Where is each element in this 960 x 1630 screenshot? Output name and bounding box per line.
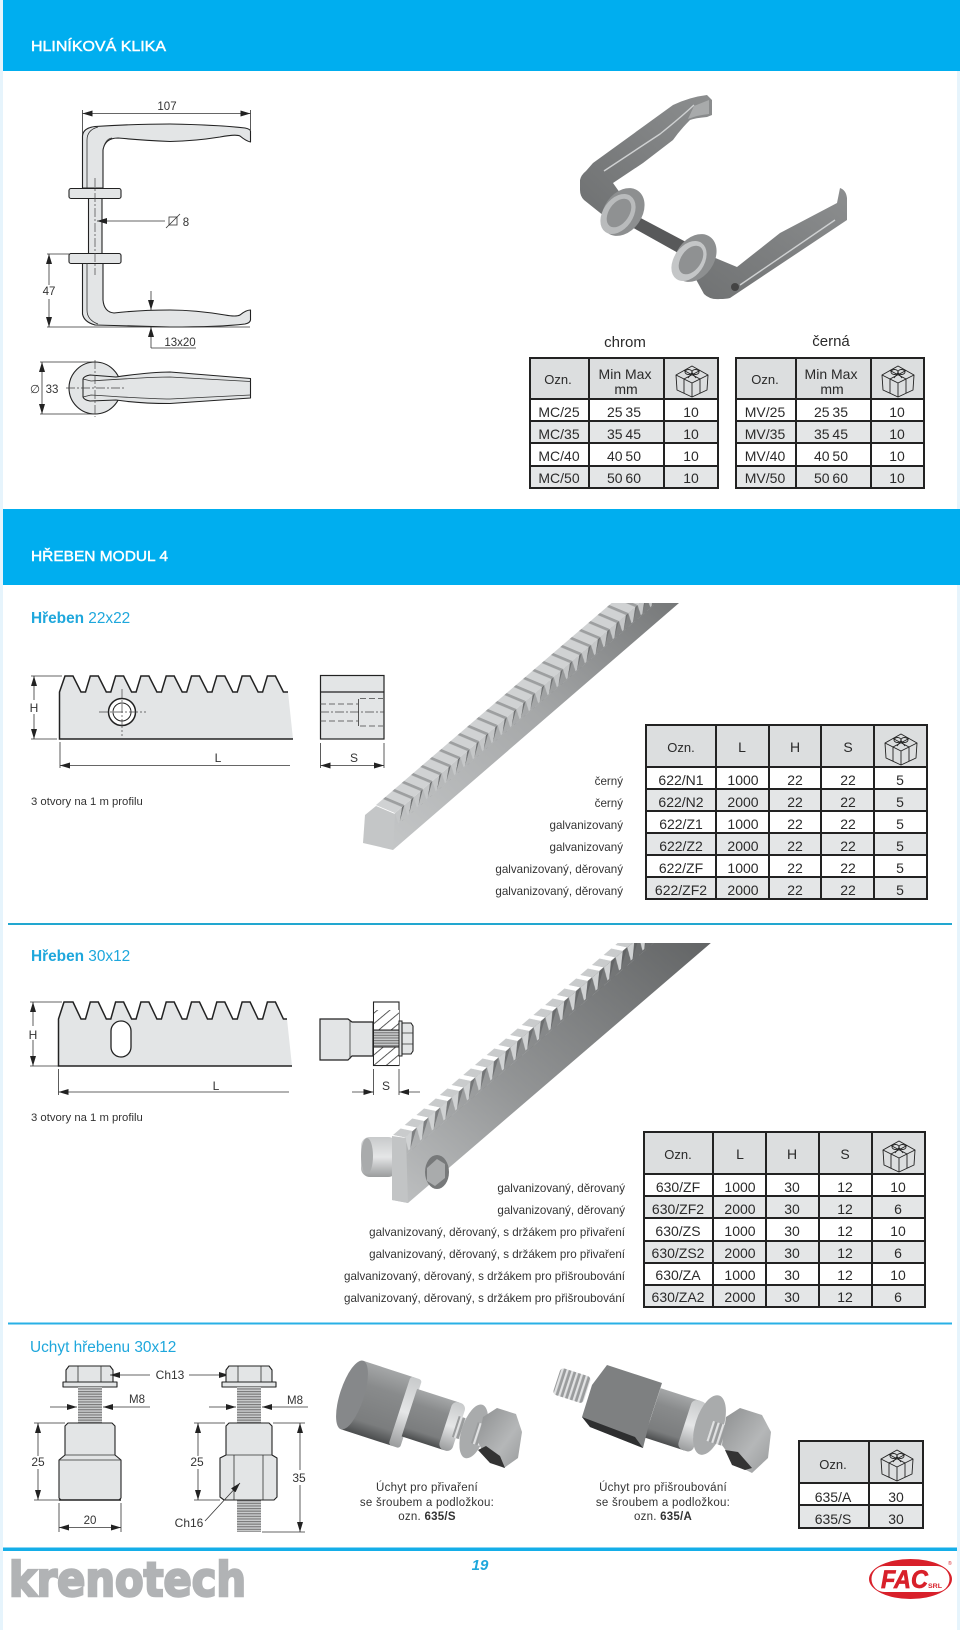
tooth tops <box>376 603 640 813</box>
table: černá: 50 60 <box>814 470 848 486</box>
table: rack 30x12: 30 <box>784 1245 800 1261</box>
table: chrom: 40 50 <box>607 448 641 464</box>
table: rack 22x22: 5 <box>896 860 904 876</box>
logo: FAC <box>869 1559 952 1599</box>
table: černá: MV/50 <box>745 470 785 486</box>
labels: rack 22x22 finishes <box>495 775 623 898</box>
labels: rack 30x12 finishes: galvanizovaný, děrovaný, s držákem pro přišroubování <box>344 1292 626 1305</box>
table: rack 22x22: 2000 <box>727 838 759 854</box>
table: rack 30x12: 2000 <box>724 1245 756 1261</box>
table: rack 22x22: H <box>790 739 800 755</box>
table: bracket 635 <box>799 1441 923 1528</box>
table: rack 22x22: 2000 <box>727 882 759 898</box>
technical drawing: rack 22x22 end view <box>320 676 384 768</box>
table: bracket 635: 635/S <box>815 1511 851 1527</box>
table: chrom: MC/35 <box>538 426 580 442</box>
dimension H: H <box>30 701 38 715</box>
dimension square 8: 8 <box>183 217 189 229</box>
table: chrom: 35 45 <box>607 426 641 442</box>
technical drawing: welded bracket <box>30 1366 229 1532</box>
table: chrom <box>530 358 718 488</box>
table: rack 22x22: 622/Z1 <box>659 816 703 832</box>
dimension 25 <box>30 1423 65 1500</box>
table: rack 30x12: 10 <box>890 1179 906 1195</box>
tooth tops <box>393 943 632 1138</box>
table: černá: MV/35 <box>745 426 785 442</box>
table: rack 22x22: 5 <box>896 838 904 854</box>
logo: FAC: FAC <box>881 1566 929 1594</box>
table: černá: Ozn. <box>751 372 779 387</box>
shaft <box>612 205 686 254</box>
subheading: Hřeben 30x12: Hřeben 30x12 <box>31 948 130 965</box>
labels: rack 30x12 finishes: galvanizovaný, děrovaný, s držákem pro přišroubování <box>344 1270 626 1283</box>
dimension 20: 20 <box>84 1515 96 1527</box>
dimension 25: 25 <box>31 1455 45 1469</box>
table: rack 22x22: 22 <box>787 860 803 876</box>
table: černá: 35 45 <box>814 426 848 442</box>
table: černá: 10 <box>889 470 905 486</box>
bracket cylinder <box>361 1137 392 1177</box>
table: černá: MV/25 <box>745 404 785 420</box>
table: rack 22x22: 5 <box>896 816 904 832</box>
table: rack 30x12: 30 <box>784 1223 800 1239</box>
caption: 635/S: ozn. 635/S <box>398 1511 456 1523</box>
table: rack 30x12: 6 <box>894 1201 902 1217</box>
table: černá: 25 35 <box>814 404 848 420</box>
table: rack 22x22: 5 <box>896 882 904 898</box>
caption: 635/A <box>596 1481 730 1523</box>
dimension M8 <box>50 1394 150 1407</box>
icon: package <box>881 1450 913 1481</box>
table: rack 22x22: 22 <box>840 860 856 876</box>
table: rack 30x12: 12 <box>837 1179 853 1195</box>
labels: rack 22x22 finishes: černý <box>595 775 623 788</box>
upper collar <box>593 180 653 244</box>
technical drawing: rack 30x12 side view <box>27 1002 292 1095</box>
3D illustration: rack 30x12 with bracket <box>361 943 711 1203</box>
table: rack 22x22: S <box>843 739 853 755</box>
section band: Hliníková klika <box>3 0 960 71</box>
table: rack 22x22: 22 <box>787 816 803 832</box>
lower lever <box>687 188 847 299</box>
subheading: Hřeben 22x22: Hřeben 22x22 <box>31 610 130 627</box>
table: rack 30x12: 1000 <box>724 1179 756 1195</box>
dimension L: L <box>213 1079 220 1093</box>
table: rack 30x12: 30 <box>784 1289 800 1305</box>
labels: rack 30x12 finishes: galvanizovaný, děrovaný, s držákem pro přivaření <box>369 1248 626 1261</box>
table: rack 22x22: 22 <box>840 772 856 788</box>
3D illustration: screw-on bracket 635/A <box>548 1346 771 1473</box>
table: černá: 40 50 <box>814 448 848 464</box>
technical drawing: rack 30x12 section with bracket: S <box>382 1079 390 1093</box>
dimension 20 <box>59 1503 121 1532</box>
lower lever <box>82 263 250 327</box>
caption: 635/A: ozn. 635/A <box>634 1511 692 1523</box>
table: rack 30x12: 1000 <box>724 1223 756 1239</box>
icon: package <box>883 1141 915 1172</box>
table: chrom: 10 <box>683 448 699 464</box>
table: černá: mm <box>820 381 844 397</box>
icon: package <box>676 366 708 397</box>
logo: krenotech: krenotech <box>9 1553 246 1608</box>
table: rack 22x22 <box>646 725 927 899</box>
section band: Hřeben modul 4 <box>3 509 960 585</box>
labels: rack 22x22 finishes: černý <box>595 797 623 810</box>
technical drawing: handle top view: 33 <box>46 384 58 396</box>
table: černá: 10 <box>889 448 905 464</box>
note: 3 otvory na 1 m profilu: 3 otvory na 1 m profilu <box>31 1112 143 1124</box>
icon: package <box>885 734 917 765</box>
table: rack 30x12: 630/ZA <box>655 1267 701 1283</box>
dimension 107 <box>82 101 250 135</box>
labels: rack 30x12 finishes: galvanizovaný, děrovaný <box>497 1182 625 1195</box>
table: černá: MV/40 <box>745 448 785 464</box>
table: rack 22x22: 22 <box>840 838 856 854</box>
technical drawing: handle top view: ∅ <box>30 384 40 396</box>
technical drawing: rack 22x22 end view: S <box>350 751 358 765</box>
table: rack 30x12: 630/ZF2 <box>652 1201 704 1217</box>
table: chrom: 25 35 <box>607 404 641 420</box>
rack end face <box>363 806 395 850</box>
table: rack 30x12: 10 <box>890 1267 906 1283</box>
labels: rack 30x12 finishes <box>344 1182 626 1305</box>
dimension 25 <box>190 1423 225 1500</box>
caption: 635/S: Úchyt pro přivaření <box>376 1481 479 1494</box>
table: bracket 635: 635/A <box>815 1489 852 1505</box>
labels: rack 22x22 finishes: galvanizovaný, děrovaný <box>495 885 623 898</box>
table heading: černá: černá <box>812 333 850 350</box>
table: rack 30x12: 30 <box>784 1179 800 1195</box>
dimension 35: 35 <box>292 1471 306 1485</box>
table: rack 30x12: 12 <box>837 1289 853 1305</box>
table: rack 22x22: 22 <box>787 838 803 854</box>
table: rack 22x22: 22 <box>787 772 803 788</box>
3D illustration: door handle <box>580 95 847 299</box>
labels: rack 30x12 finishes: galvanizovaný, děrovaný, s držákem pro přivaření <box>369 1226 626 1239</box>
table: chrom: MC/25 <box>538 404 580 420</box>
table: rack 30x12 <box>644 1132 925 1307</box>
dimension 25: 25 <box>190 1455 204 1469</box>
table: chrom: MC/50 <box>538 470 580 486</box>
note: 3 otvory na 1 m profilu: 3 otvory na 1 m profilu <box>31 796 143 808</box>
dimension 107: 107 <box>157 101 177 113</box>
table: rack 30x12: 30 <box>784 1201 800 1217</box>
table: rack 30x12: L <box>736 1146 744 1162</box>
table: černá <box>736 358 924 488</box>
upper lever <box>580 95 712 216</box>
dimension H: H <box>29 1028 37 1042</box>
table: chrom: 10 <box>683 404 699 420</box>
technical drawing: screw-on bracket <box>175 1366 308 1532</box>
dimension 47 <box>41 254 250 327</box>
table: rack 22x22: 5 <box>896 772 904 788</box>
table: rack 22x22: 22 <box>840 882 856 898</box>
dimension 13x20: 13x20 <box>164 337 196 349</box>
table: černá: 10 <box>889 426 905 442</box>
table: rack 22x22: Ozn. <box>667 740 695 755</box>
table: bracket 635: Ozn. <box>819 1457 847 1472</box>
table: rack 30x12: 12 <box>837 1223 853 1239</box>
table: rack 30x12: 2000 <box>724 1289 756 1305</box>
table: rack 22x22: L <box>738 739 746 755</box>
upper lever <box>82 124 250 188</box>
table: rack 22x22: 622/Z2 <box>659 838 703 854</box>
table: rack 22x22: 1000 <box>727 772 759 788</box>
table: rack 30x12: S <box>840 1146 850 1162</box>
dimension M8: M8 <box>287 1395 303 1407</box>
table: bracket 635: 30 <box>888 1489 904 1505</box>
table heading: chrom: chrom <box>604 334 646 351</box>
icon: package <box>882 366 914 397</box>
shaft and collars <box>69 127 121 324</box>
table: rack 30x12: 30 <box>784 1267 800 1283</box>
tooth flanks <box>396 603 654 821</box>
table: rack 30x12: Ozn. <box>664 1147 692 1162</box>
3D illustration: weld-on bracket 635/S <box>329 1357 522 1476</box>
dimension L: L <box>215 751 222 765</box>
caption: 635/S: se šroubem a podložkou: <box>360 1497 494 1509</box>
dimension Ch16: Ch16 <box>175 1516 204 1530</box>
table: rack 22x22: 622/ZF <box>659 860 703 876</box>
caption: 635/S <box>360 1481 494 1523</box>
technical drawing: rack 22x22 side view <box>28 676 293 768</box>
table: rack 22x22: 22 <box>787 794 803 810</box>
table: rack 30x12: 630/ZF <box>656 1179 700 1195</box>
technical drawing: door handle side view <box>41 101 250 349</box>
technical drawing: handle top view <box>30 360 250 417</box>
table: rack 30x12: 630/ZA2 <box>652 1289 705 1305</box>
table: rack 22x22: 622/N1 <box>658 772 704 788</box>
dimension 47: 47 <box>43 286 55 298</box>
table: chrom: 50 60 <box>607 470 641 486</box>
bolt head <box>425 1155 449 1189</box>
tooth flanks <box>405 943 654 1150</box>
table: rack 30x12: 12 <box>837 1267 853 1283</box>
table: rack 22x22: 622/N2 <box>658 794 704 810</box>
table: rack 22x22: 5 <box>896 794 904 810</box>
logo: FAC: ® <box>948 1560 952 1567</box>
technical drawing: rack 30x12 section with bracket <box>320 1002 420 1095</box>
side face <box>393 603 679 850</box>
logo: FAC: SRL <box>928 1584 942 1590</box>
rack face <box>392 936 719 1203</box>
mounting slot <box>111 1021 131 1057</box>
table: bracket 635: 30 <box>888 1511 904 1527</box>
section band: Hřeben modul 4: HŘEBEN MODUL 4 <box>31 548 168 565</box>
table: rack 30x12: 6 <box>894 1289 902 1305</box>
3D illustration: rack 22x22 <box>363 603 679 850</box>
table: chrom: 10 <box>683 426 699 442</box>
table: rack 22x22: 1000 <box>727 816 759 832</box>
caption: 635/A: Úchyt pro přišroubování <box>599 1481 727 1494</box>
dimension Ch16 <box>175 1483 240 1530</box>
table: rack 22x22: 22 <box>840 794 856 810</box>
table: černá: 10 <box>889 404 905 420</box>
table: rack 30x12: 10 <box>890 1223 906 1239</box>
table: rack 22x22: 1000 <box>727 860 759 876</box>
table: rack 30x12: 630/ZS <box>655 1223 701 1239</box>
table: rack 30x12: 630/ZS2 <box>652 1245 705 1261</box>
dimension Ch13 <box>110 1368 229 1382</box>
table: rack 30x12: 1000 <box>724 1267 756 1283</box>
table: rack 30x12: 12 <box>837 1245 853 1261</box>
dimension 13x20 <box>151 291 196 349</box>
dimension H <box>28 676 62 739</box>
table: rack 30x12: 2000 <box>724 1201 756 1217</box>
table: rack 30x12: 6 <box>894 1245 902 1261</box>
dimension Ch13: Ch13 <box>156 1368 185 1382</box>
dimension 35 <box>262 1423 308 1532</box>
section band: Hliníková klika: HLINÍKOVÁ KLIKA <box>31 38 166 55</box>
table: chrom: mm <box>614 381 638 397</box>
labels: rack 22x22 finishes: galvanizovaný, děrovaný <box>495 863 623 876</box>
subheading: Uchyt hřebenu 30x12: Uchyt hřebenu 30x12 <box>30 1339 176 1356</box>
dimension M8 <box>209 1395 308 1407</box>
caption: 635/A: se šroubem a podložkou: <box>596 1497 730 1509</box>
table: chrom: Ozn. <box>544 372 572 387</box>
mounting hole <box>99 689 146 736</box>
table: rack 22x22: 22 <box>840 816 856 832</box>
labels: rack 30x12 finishes: galvanizovaný, děrovaný <box>497 1204 625 1217</box>
page number: 19 <box>472 1557 489 1574</box>
labels: rack 22x22 finishes: galvanizovaný <box>550 819 623 832</box>
table: rack 22x22: 622/ZF2 <box>655 882 707 898</box>
table: rack 22x22: 22 <box>787 882 803 898</box>
table: chrom: 10 <box>683 470 699 486</box>
table: rack 30x12: 12 <box>837 1201 853 1217</box>
dimension M8: M8 <box>129 1394 145 1406</box>
table: černá: Min Max <box>805 366 857 382</box>
dimension H <box>27 1002 62 1066</box>
table: chrom: Min Max <box>599 366 651 382</box>
dimension square 8 <box>97 214 189 229</box>
table: chrom: MC/40 <box>538 448 580 464</box>
table: rack 30x12: H <box>787 1146 797 1162</box>
labels: rack 22x22 finishes: galvanizovaný <box>550 841 623 854</box>
lower collar <box>665 226 725 290</box>
table: rack 22x22: 2000 <box>727 794 759 810</box>
rack end face <box>392 1136 408 1203</box>
